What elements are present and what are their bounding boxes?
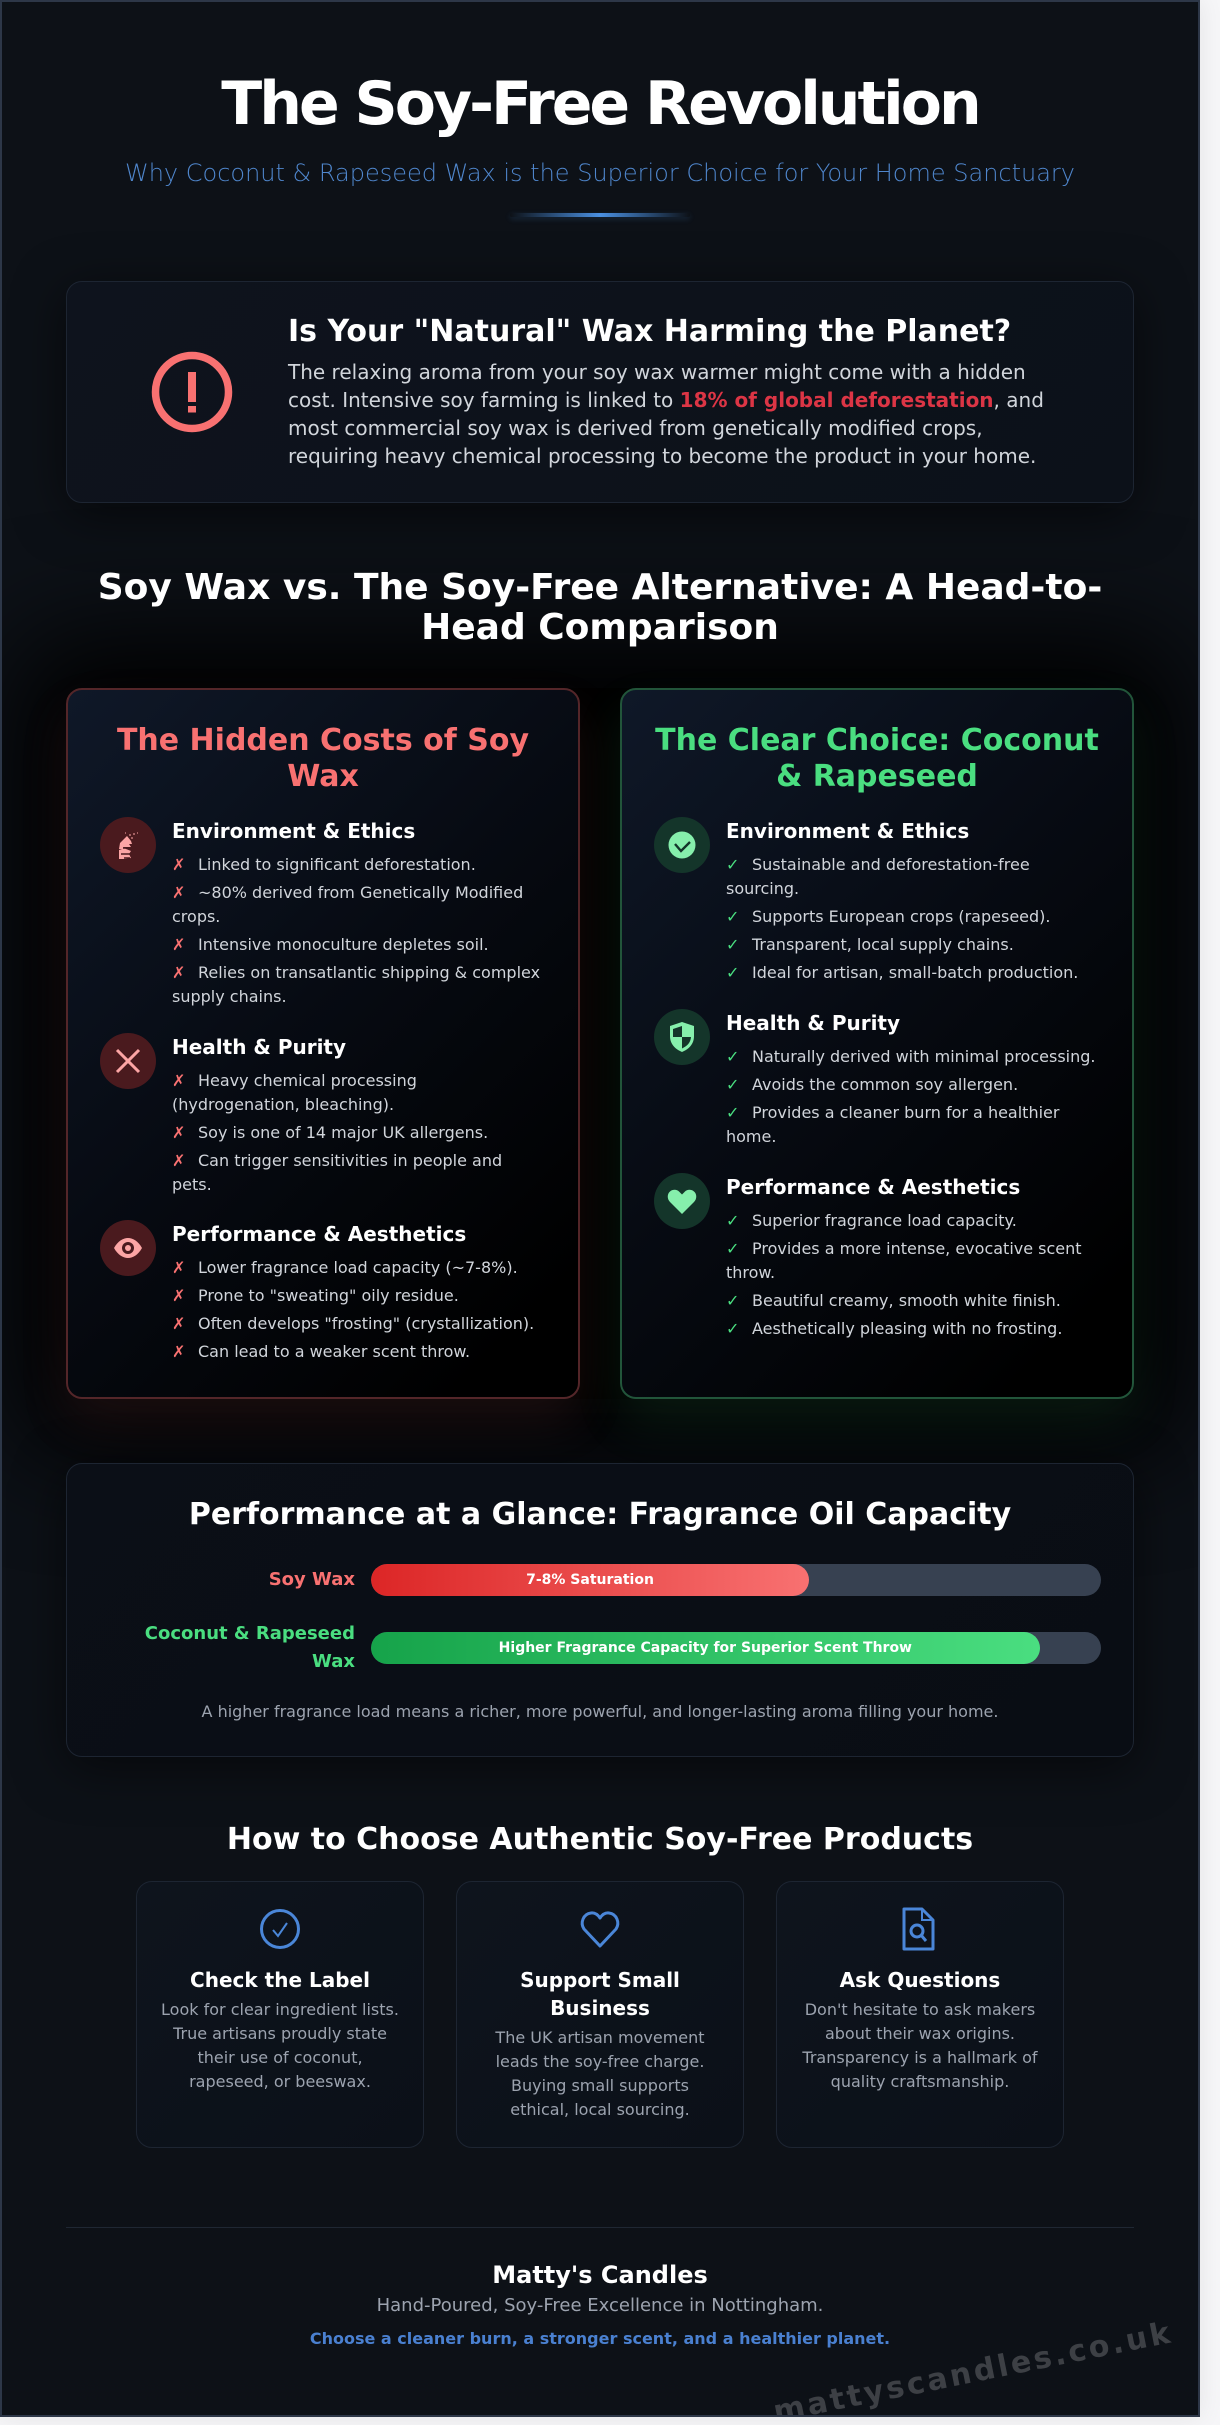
- coconut health list: ✓: [726, 1075, 739, 1094]
- soy performance list: ✗: [172, 1314, 185, 1333]
- coconut environment list: [726, 855, 1078, 982]
- card text: quality craftsmanship.: [831, 2072, 1009, 2091]
- group heading: Environment & Ethics: [726, 819, 969, 843]
- coconut environment list: ✓: [726, 935, 739, 954]
- subtitle: Why Coconut & Rapeseed Wax is the Superior Choice for Your Home Sanctuary: [125, 159, 1075, 187]
- soy health list: pets.: [172, 1175, 212, 1194]
- bar: soy wax: 7-8% Saturation: [526, 1572, 654, 1588]
- card text: Don't hesitate to ask makers: [805, 2000, 1035, 2019]
- card text: The UK artisan movement: [495, 2028, 705, 2047]
- coconut environment list: Sustainable and deforestation-free: [752, 855, 1030, 874]
- group heading: Environment & Ethics: [172, 819, 415, 843]
- coconut performance list: throw.: [726, 1263, 775, 1282]
- coconut health list: Provides a cleaner burn for a healthier: [752, 1103, 1059, 1122]
- group: environment and ethics: [172, 819, 540, 1006]
- card text: their use of coconut,: [197, 2048, 363, 2067]
- soy panel heading: [117, 723, 529, 794]
- soy environment list: crops.: [172, 907, 220, 926]
- icon: heart: [654, 1173, 710, 1229]
- soy health list: ✗: [172, 1123, 185, 1142]
- card text: Look for clear ingredient lists.: [161, 2000, 399, 2019]
- soy environment list: Linked to significant deforestation.: [198, 855, 476, 874]
- bar label: coconut and rapeseed wax: Coconut & Rapeseed: [145, 1623, 355, 1644]
- soy health list: Soy is one of 14 major UK allergens.: [198, 1123, 488, 1142]
- icon: eye: [100, 1220, 156, 1276]
- coconut performance list: Aesthetically pleasing with no frosting.: [752, 1319, 1062, 1338]
- coconut performance list: Beautiful creamy, smooth white finish.: [752, 1291, 1061, 1310]
- title: The Soy-Free Revolution: [221, 69, 979, 139]
- coconut environment list: ✓: [726, 907, 739, 926]
- footer tagline: Hand-Poured, Soy-Free Excellence in Nottingham.: [377, 2295, 823, 2316]
- card text: leads the soy-free charge.: [496, 2052, 704, 2071]
- coconut environment list: ✓: [726, 963, 739, 982]
- soy performance list: ✗: [172, 1258, 185, 1277]
- panel: soy wax hidden costs: [66, 688, 580, 1399]
- soy health list: Heavy chemical processing: [198, 1071, 417, 1090]
- title divider: [510, 213, 690, 217]
- coconut health list: ✓: [726, 1103, 739, 1122]
- comparison heading: Soy Wax vs. The Soy-Free Alternative: A Head-to-: [98, 567, 1102, 608]
- intro text: cost. Intensive soy farming is linked to 18% of global deforestation, and: [288, 388, 1044, 412]
- intro text: requiring heavy chemical processing to become the product in your home.: [288, 444, 1036, 468]
- soy performance list: Can lead to a weaker scent throw.: [198, 1342, 470, 1361]
- coconut panel heading: The Clear Choice: Coconut: [655, 723, 1099, 758]
- card title: Business: [550, 1996, 650, 2020]
- coconut health list: [726, 1047, 1095, 1146]
- card title: Check the Label: [190, 1968, 370, 1992]
- card text: rapeseed, or beeswax.: [189, 2072, 371, 2091]
- coconut performance list: Superior fragrance load capacity.: [752, 1211, 1017, 1230]
- soy performance list: ✗: [172, 1342, 185, 1361]
- bar label: coconut and rapeseed wax: [145, 1623, 355, 1672]
- intro text: [288, 360, 1044, 468]
- card text: True artisans proudly state: [173, 2024, 387, 2043]
- soy health list: ✗: [172, 1151, 185, 1170]
- icon: warning circle: [152, 352, 232, 432]
- soy health list: (hydrogenation, bleaching).: [172, 1095, 394, 1114]
- coconut health list: Naturally derived with minimal processing.: [752, 1047, 1095, 1066]
- icon: shield: [654, 1009, 710, 1065]
- card: ask questions: [776, 1881, 1064, 2148]
- card text: Transparency is a hallmark of: [802, 2048, 1038, 2067]
- panel: intro warning: [66, 281, 1134, 503]
- icon: check circle: [260, 1909, 300, 1949]
- comparison heading: [98, 567, 1102, 648]
- group: environment and ethics: [726, 819, 1078, 982]
- intro text: The relaxing aroma from your soy wax warmer might come with a hidden: [288, 360, 1026, 384]
- group: performance and aesthetics: [726, 1175, 1082, 1338]
- soy health list: Can trigger sensitivities in people and: [198, 1151, 502, 1170]
- group: health and purity: [726, 1011, 1095, 1146]
- soy environment list: ✗: [172, 963, 185, 982]
- group heading: Performance & Aesthetics: [172, 1222, 466, 1246]
- soy panel heading: Wax: [287, 758, 359, 794]
- soy environment list: ✗: [172, 935, 185, 954]
- soy environment list: [172, 855, 540, 1006]
- soy performance list: ✗: [172, 1286, 185, 1305]
- soy environment list: Intensive monoculture depletes soil.: [198, 935, 489, 954]
- soy environment list: Relies on transatlantic shipping & complex: [198, 963, 540, 982]
- group heading: Health & Purity: [172, 1035, 346, 1059]
- comparison heading: Head Comparison: [421, 607, 779, 648]
- card: support small business: [456, 1881, 744, 2148]
- icon: document search: [902, 1908, 934, 1950]
- coconut panel heading: [655, 723, 1099, 794]
- coconut performance list: [726, 1211, 1082, 1338]
- group heading: Performance & Aesthetics: [726, 1175, 1020, 1199]
- footer call to action: Choose a cleaner burn, a stronger scent, and a healthier planet.: [310, 2329, 890, 2348]
- coconut performance list: ✓: [726, 1319, 739, 1338]
- card text: ethical, local sourcing.: [510, 2100, 690, 2119]
- bar label: coconut and rapeseed wax: Wax: [312, 1651, 355, 1672]
- coconut environment list: sourcing.: [726, 879, 799, 898]
- coconut health list: ✓: [726, 1047, 739, 1066]
- card: check the label: [136, 1881, 424, 2148]
- icon: tree: [100, 817, 156, 873]
- intro text: most commercial soy wax is derived from genetically modified crops,: [288, 416, 983, 440]
- panel: coconut and rapeseed clear choice: [620, 688, 1134, 1399]
- coconut health list: Avoids the common soy allergen.: [752, 1075, 1018, 1094]
- icon: check badge: [654, 817, 710, 873]
- panel: fragrance capacity chart: [66, 1463, 1134, 1757]
- coconut environment list: ✓: [726, 855, 739, 874]
- coconut health list: home.: [726, 1127, 776, 1146]
- bar: coconut and rapeseed wax: Higher Fragrance Capacity for Superior Scent Throw: [499, 1640, 912, 1656]
- card title: Support Small: [520, 1968, 680, 1992]
- bar label: soy wax: Soy Wax: [269, 1569, 355, 1590]
- coconut performance list: ✓: [726, 1291, 739, 1310]
- bar: soy wax: [371, 1564, 1101, 1596]
- card text: Buying small supports: [511, 2076, 689, 2095]
- coconut performance list: ✓: [726, 1239, 739, 1258]
- card text: [495, 2028, 705, 2119]
- soy environment list: ✗: [172, 855, 185, 874]
- soy performance list: Often develops "frosting" (crystallization).: [198, 1314, 534, 1333]
- soy environment list: supply chains.: [172, 987, 287, 1006]
- chart note: A higher fragrance load means a richer, more powerful, and longer-lasting aroma filling your home.: [202, 1702, 998, 1721]
- footer rule: [66, 2227, 1134, 2228]
- coconut environment list: Transparent, local supply chains.: [752, 935, 1014, 954]
- coconut performance list: ✓: [726, 1211, 739, 1230]
- soy panel heading: The Hidden Costs of Soy: [117, 723, 529, 758]
- soy environment list: ✗: [172, 883, 185, 902]
- card title: Ask Questions: [840, 1968, 1000, 1992]
- card text: [802, 2000, 1038, 2091]
- group: performance and aesthetics: [172, 1222, 534, 1361]
- chart heading: Performance at a Glance: Fragrance Oil Capacity: [189, 1497, 1011, 1532]
- coconut panel heading: & Rapeseed: [776, 758, 978, 794]
- card text: about their wax origins.: [825, 2024, 1015, 2043]
- group heading: Health & Purity: [726, 1011, 900, 1035]
- how to choose heading: How to Choose Authentic Soy-Free Products: [227, 1822, 973, 1857]
- card text: [161, 2000, 399, 2091]
- coconut environment list: Ideal for artisan, small-batch production.: [752, 963, 1078, 982]
- soy health list: [172, 1071, 502, 1194]
- soy performance list: [172, 1258, 534, 1361]
- icon: cross: [100, 1033, 156, 1089]
- card title: [520, 1968, 680, 2020]
- coconut environment list: Supports European crops (rapeseed).: [752, 907, 1050, 926]
- coconut performance list: Provides a more intense, evocative scent: [752, 1239, 1082, 1258]
- soy health list: ✗: [172, 1071, 185, 1090]
- group: health and purity: [172, 1035, 502, 1194]
- soy environment list: ~80% derived from Genetically Modified: [198, 883, 523, 902]
- intro heading: Is Your "Natural" Wax Harming the Planet?: [288, 314, 1011, 349]
- soy performance list: Prone to "sweating" oily residue.: [198, 1286, 459, 1305]
- soy performance list: Lower fragrance load capacity (~7-8%).: [198, 1258, 518, 1277]
- bar: coconut and rapeseed wax: [371, 1632, 1101, 1664]
- footer brand: Matty's Candles: [492, 2261, 708, 2289]
- icon: heart outline: [580, 1911, 620, 1948]
